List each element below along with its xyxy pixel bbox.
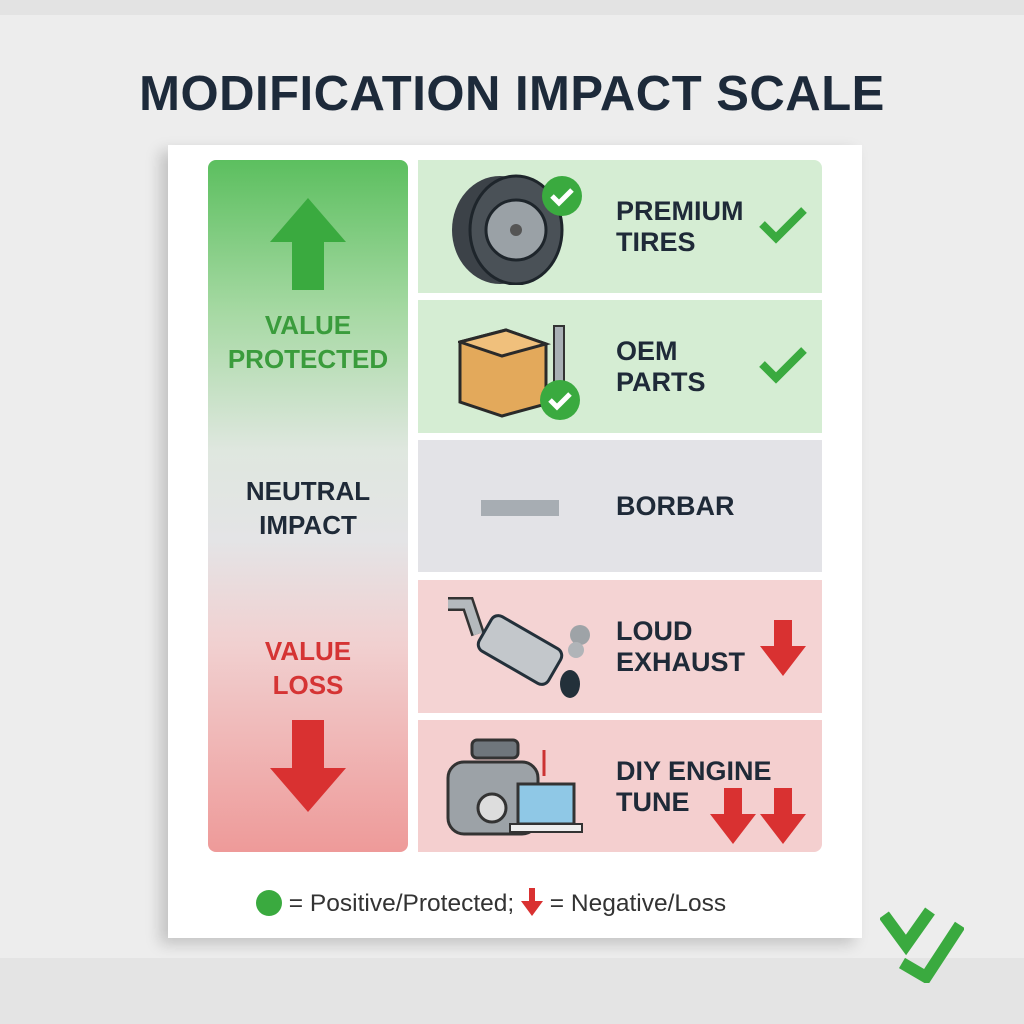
icon: up arrow: [270, 198, 346, 290]
panel: scale column: [208, 160, 408, 852]
icon: box and wrench: [458, 325, 580, 420]
row: oem parts: [418, 300, 822, 433]
row: premium tires: [418, 160, 822, 293]
label: PARTS: [616, 367, 706, 397]
label: DIY ENGINE: [616, 756, 772, 786]
label: EXHAUST: [616, 647, 745, 677]
row: diy engine tune: [418, 720, 822, 852]
label: BORBAR: [616, 491, 734, 521]
text: value protected: PROTECTED: [228, 344, 388, 374]
icon: down arrow: [270, 720, 346, 812]
icon: dash: [481, 500, 559, 516]
label: [616, 196, 744, 257]
text: neutral impact: [246, 476, 370, 540]
icon: engine and laptop: [446, 738, 583, 836]
label: PREMIUM: [616, 196, 744, 226]
label: OEM: [616, 336, 678, 366]
text: value loss: LOSS: [273, 670, 343, 700]
row: borbar: [418, 440, 822, 572]
icon: logo: [880, 908, 964, 983]
label: LOUD: [616, 616, 692, 646]
text: neutral impact: NEUTRAL: [246, 476, 370, 506]
label: [616, 336, 706, 397]
label: TUNE: [616, 787, 690, 817]
text: value loss: [265, 636, 351, 700]
icon: down arrow: [760, 620, 806, 676]
label: TIRES: [616, 227, 696, 257]
icon: check: [759, 347, 807, 384]
icon: double down arrow: [710, 788, 806, 844]
panel: card: [168, 145, 862, 938]
text: value loss: VALUE: [265, 636, 351, 666]
text: neutral impact: IMPACT: [259, 510, 357, 540]
icon: check: [759, 207, 807, 244]
text: value protected: [228, 310, 388, 374]
row: loud exhaust: [418, 580, 822, 713]
legend: = Positive/Protected; = Negative/Loss: [289, 890, 726, 917]
label: [616, 756, 772, 817]
label: [616, 616, 745, 677]
text: value protected: VALUE: [265, 310, 351, 340]
icon: exhaust: [448, 597, 590, 698]
icon: tire: [452, 174, 582, 285]
title: MODIFICATION IMPACT SCALE: [139, 67, 885, 121]
